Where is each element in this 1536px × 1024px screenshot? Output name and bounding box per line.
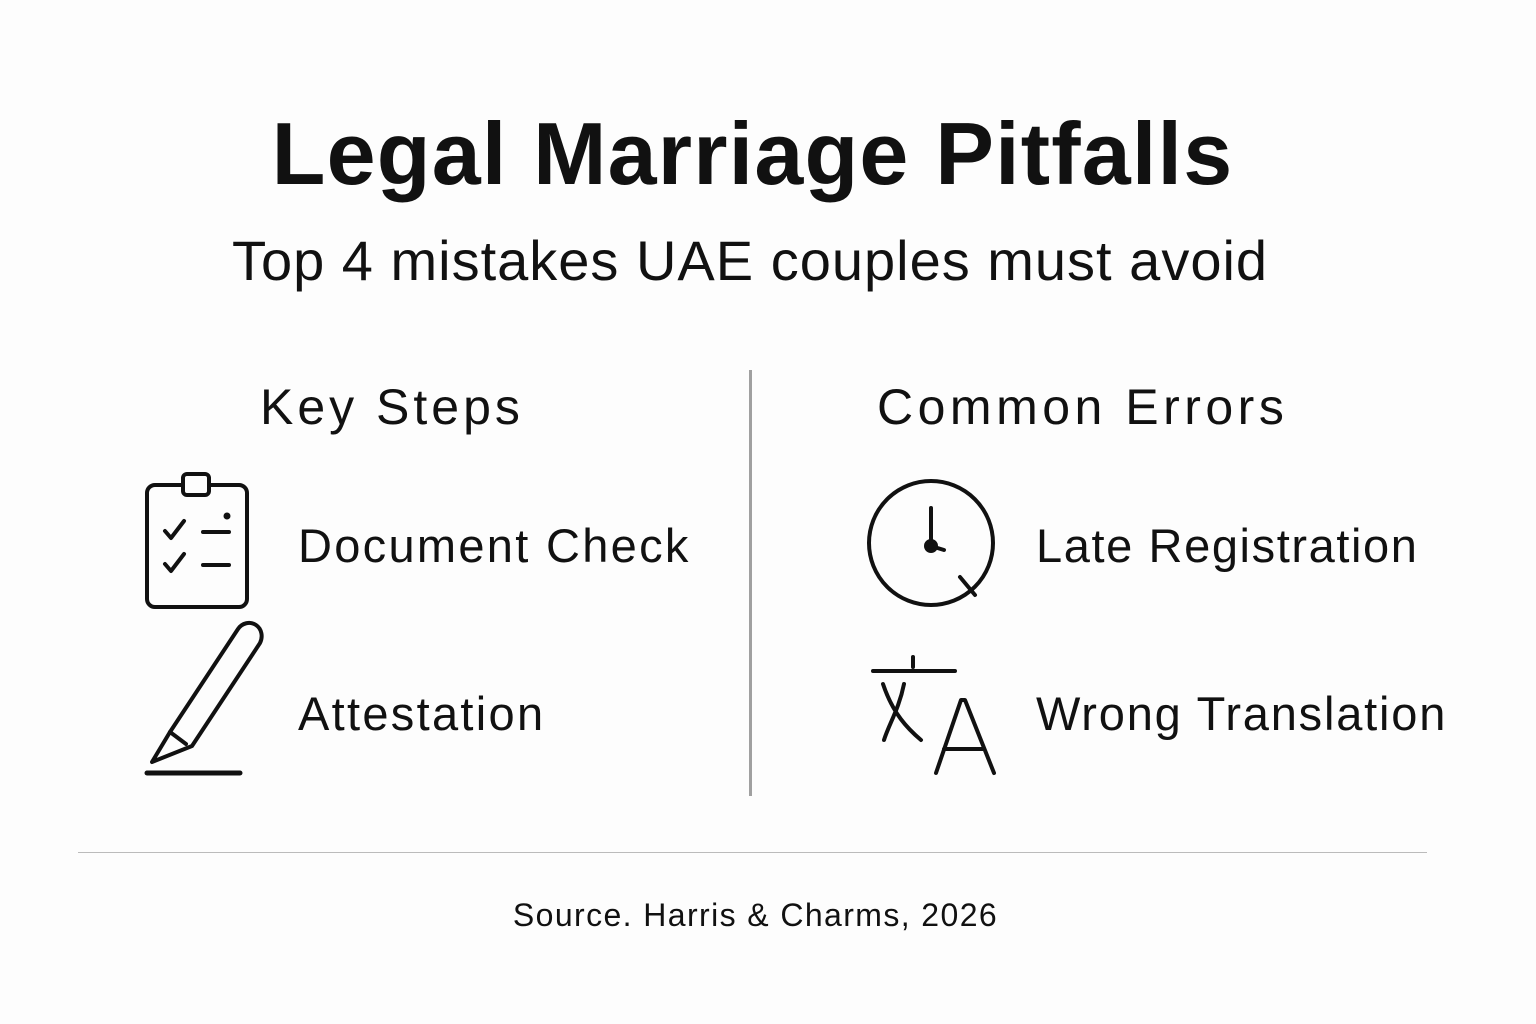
divider vertical: [749, 370, 752, 796]
icon: pencil: [147, 623, 262, 773]
subtitle: Top 4 mistakes UAE couples must avoid: [232, 229, 1268, 292]
heading: key steps: Key Steps: [260, 379, 524, 435]
icon: translate: [873, 657, 994, 773]
source: Source. Harris & Charms, 2026: [513, 897, 998, 933]
icon: clock: [869, 481, 993, 605]
icon: clipboard: [147, 474, 247, 607]
title: Legal Marriage Pitfalls: [272, 104, 1233, 203]
divider horizontal: [78, 852, 1427, 853]
label: wrong translation: Wrong Translation: [1036, 687, 1447, 740]
heading: common errors: Common Errors: [877, 379, 1288, 435]
label: document check: Document Check: [298, 519, 691, 572]
label: late registration: Late Registration: [1036, 519, 1419, 572]
label: attestation: Attestation: [298, 687, 545, 740]
